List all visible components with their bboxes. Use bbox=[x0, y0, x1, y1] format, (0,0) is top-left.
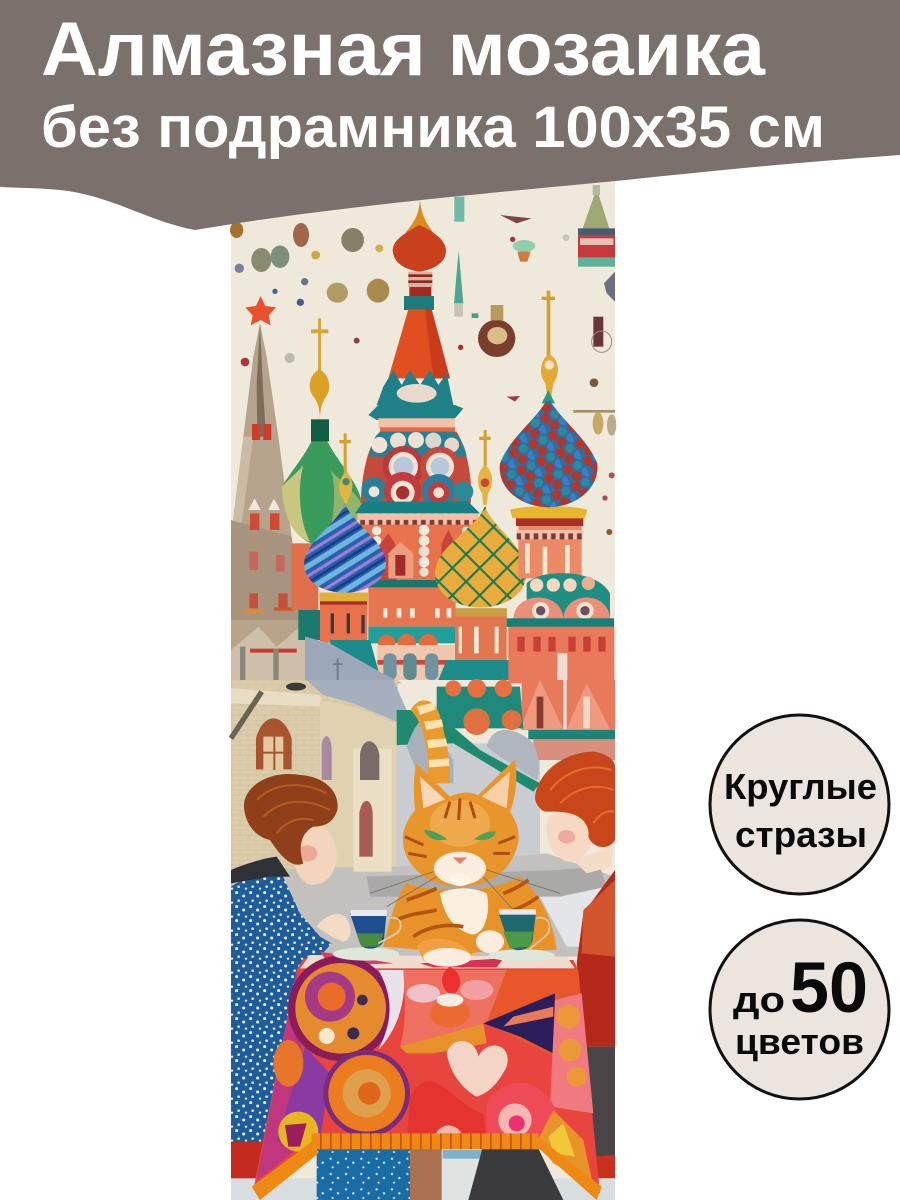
right saucer bbox=[488, 949, 555, 961]
left lady hair bbox=[244, 774, 338, 865]
right lady hair bbox=[535, 752, 615, 847]
left cup bbox=[350, 912, 387, 949]
painting background bbox=[231, 180, 615, 1200]
grey roof bbox=[305, 637, 402, 683]
left lady coat bbox=[231, 870, 332, 1143]
upper scene: cathedral and ornaments bbox=[230, 185, 616, 683]
cat head bbox=[403, 760, 519, 887]
tea cups bbox=[333, 909, 555, 961]
badge: round rhinestones bbox=[710, 715, 889, 894]
purple left panel bbox=[257, 970, 308, 1180]
left lady face bbox=[293, 825, 337, 884]
cat whiskers bbox=[370, 870, 560, 910]
tablecloth base bbox=[253, 958, 600, 1193]
cat fur stripes bbox=[397, 880, 538, 937]
header banner bbox=[0, 0, 900, 230]
heart motifs bbox=[447, 1041, 508, 1097]
badge: up to 50 colours: до bbox=[733, 979, 785, 1020]
cat chest bbox=[440, 888, 488, 934]
small building top right bbox=[578, 185, 615, 302]
left lady stool bbox=[231, 1142, 264, 1180]
badge: up to 50 colours: цветов bbox=[735, 1021, 864, 1062]
right scale dome bbox=[500, 291, 598, 578]
right cup bbox=[499, 912, 536, 950]
badge: up to 50 colours: 50 bbox=[790, 949, 868, 1028]
small teal base dome bbox=[437, 679, 523, 735]
ground below table bbox=[231, 1143, 615, 1200]
lower central block bbox=[368, 580, 457, 680]
gold lattice dome bbox=[435, 430, 527, 680]
building and street background bbox=[231, 680, 615, 957]
cat tail bbox=[411, 700, 450, 783]
title text: без подрамника 100х35 см bbox=[41, 95, 825, 160]
blue onion dome bbox=[298, 433, 386, 677]
gables and red wall bbox=[520, 680, 615, 730]
cat paws bbox=[417, 930, 504, 967]
cat muzzle bbox=[434, 852, 486, 885]
right lady jacket bbox=[577, 870, 615, 1047]
cat bbox=[370, 760, 560, 964]
cat eyes bbox=[424, 830, 447, 840]
left lady hand bbox=[317, 914, 350, 942]
right lady skirt bbox=[583, 1047, 615, 1157]
right lady bbox=[535, 752, 615, 1178]
patterned tablecloth bbox=[252, 952, 602, 1200]
lower scene: street, cat and ladies bbox=[231, 679, 615, 1200]
cat nose bbox=[453, 857, 467, 864]
small medallion bbox=[273, 1040, 303, 1087]
left lady bbox=[231, 774, 350, 1143]
cat face stripes bbox=[405, 798, 515, 857]
left saucer bbox=[333, 947, 399, 961]
green dome with cross bbox=[282, 318, 362, 610]
painting: illustration canvas bbox=[230, 180, 616, 1200]
mandala bbox=[288, 956, 393, 1061]
badge: round rhinestones: стразы bbox=[735, 814, 867, 855]
badge: up to 50 colours bbox=[710, 920, 889, 1099]
hanging ornaments bbox=[230, 197, 616, 535]
title text bbox=[41, 7, 825, 160]
right lady neck bbox=[573, 847, 613, 873]
right block with kokoshniks bbox=[507, 573, 614, 683]
central tower bbox=[355, 200, 480, 583]
badge: round rhinestones: Круглые bbox=[724, 766, 877, 807]
title text: Алмазная мозаика bbox=[41, 7, 766, 92]
tablecloth fringe bbox=[252, 1133, 602, 1200]
right panel navy and orange bbox=[487, 970, 583, 1057]
cat body bbox=[383, 877, 557, 964]
floral center bbox=[400, 970, 507, 1047]
sun medallion bbox=[323, 1050, 410, 1137]
tablecloth top bbox=[300, 955, 575, 968]
left spire with star bbox=[231, 296, 307, 680]
right lady face bbox=[547, 811, 593, 862]
